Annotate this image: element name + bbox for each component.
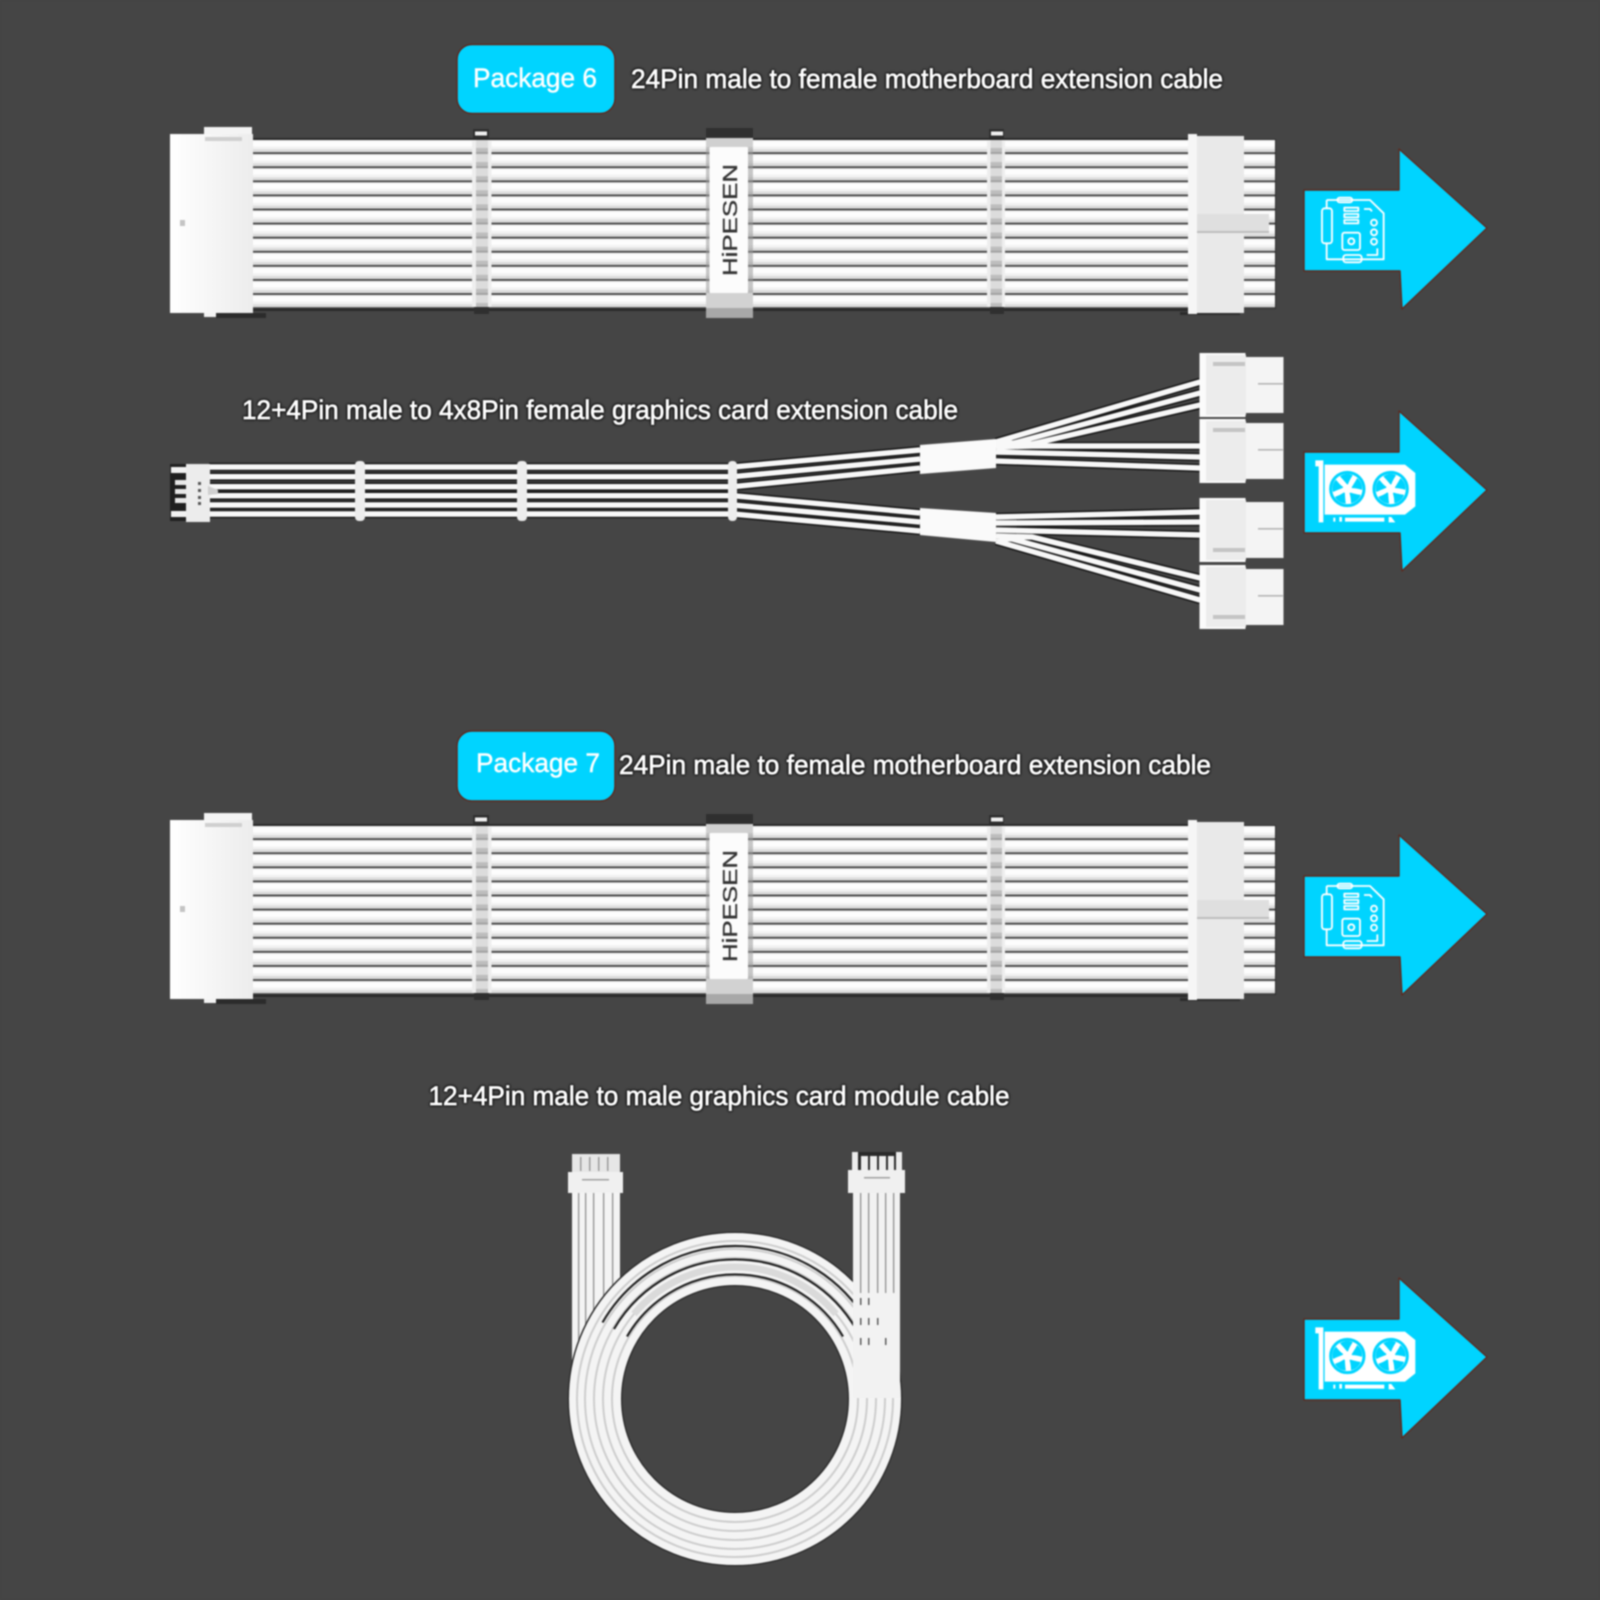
- badge: Package 7: [457, 731, 615, 801]
- cable combs: [355, 461, 737, 521]
- coil: [577, 1241, 893, 1557]
- wires: [209, 382, 1200, 600]
- right plug: [848, 1152, 905, 1193]
- cable: 24Pin motherboard extension, Package 7: HiPESEN: [720, 850, 742, 962]
- heading: Package 7 graphics card cable: 12+4Pin male to male graphics card module cable: [428, 1081, 1010, 1111]
- arrow icon: motherboard, Package 7: [1304, 835, 1487, 995]
- splitter sleeves: [920, 439, 996, 542]
- cable: 24Pin motherboard extension, Package 6: HiPESEN: [720, 164, 742, 276]
- cable: coiled 12+4Pin male to male module cable: [568, 1152, 905, 1557]
- badge: Package 6: [457, 44, 615, 114]
- left wires: [572, 1193, 620, 1373]
- badge: Package 6: Package 6: [473, 63, 597, 93]
- 8Pin connectors: [1200, 353, 1284, 629]
- 12+4Pin plug: [170, 464, 218, 522]
- heading: Package 6 graphics card cable: 12+4Pin male to 4x8Pin female graphics card extension cable: [242, 395, 958, 425]
- left plug: [568, 1154, 623, 1193]
- cable: 24Pin motherboard extension, Package 7: [170, 813, 1276, 1004]
- arrow icon: motherboard, Package 6: [1304, 149, 1487, 309]
- right wires: [853, 1193, 900, 1398]
- cable: 24Pin motherboard extension, Package 6: [170, 127, 1276, 318]
- cable: 12+4Pin to 4x8Pin graphics card extension: [170, 353, 1284, 629]
- heading: Package 7 motherboard cable: 24Pin male to female motherboard extension cable: [619, 750, 1211, 780]
- heading: Package 6 motherboard cable: 24Pin male to female motherboard extension cable: [631, 64, 1223, 94]
- arrow icon: graphics card, Package 6: [1304, 411, 1487, 571]
- arrow icon: graphics card, Package 7: [1304, 1278, 1487, 1438]
- badge: Package 7: Package 7: [476, 748, 600, 778]
